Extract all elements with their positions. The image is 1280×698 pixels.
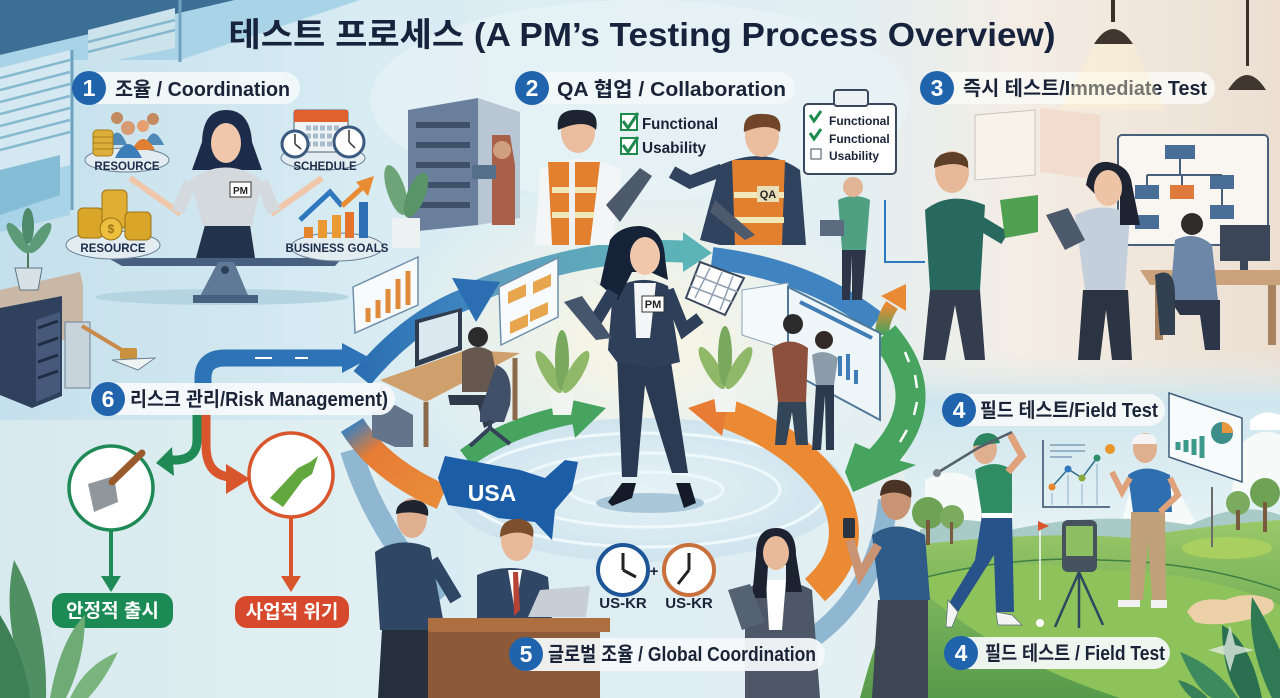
arrow: down to business crisis xyxy=(281,517,301,592)
title: 테스트 프로세스 (A PM’s Testing Process Overview) xyxy=(228,16,1056,53)
panel: immediate test xyxy=(975,108,1280,350)
label 4 bottom: 4 xyxy=(955,640,968,666)
QA collaboration: checklist: Functional xyxy=(642,116,718,133)
seesaw shadow xyxy=(95,289,349,305)
panel: coordination scene: SCHEDULE xyxy=(293,161,357,173)
USA map: USA xyxy=(468,480,516,506)
label 6: 리스크 관리/Risk Management) xyxy=(130,388,388,411)
icon: trowel in circle xyxy=(69,446,153,530)
label 3: 즉시 테스트/Immediate Test xyxy=(963,77,1207,100)
monitors: chart boards xyxy=(353,257,558,345)
resource 1 xyxy=(85,148,169,172)
panel: coordination scene: BUSINESS GOALS xyxy=(286,243,389,255)
QA collaboration: right engineer xyxy=(672,114,806,245)
panel: coordination scene: PM xyxy=(233,186,248,197)
business goals xyxy=(291,233,383,261)
coins xyxy=(66,231,160,259)
label 5: 5 xyxy=(520,641,533,667)
desk worker xyxy=(372,308,520,447)
label 4 top: 필드 테스트/Field Test xyxy=(980,399,1158,422)
immediate test: woman with tablet xyxy=(1046,162,1140,360)
field tester with phone xyxy=(843,480,930,698)
immediate test: man with folder xyxy=(923,151,1038,360)
outcome: business crisis xyxy=(235,596,349,628)
panel: field test background xyxy=(860,350,1280,698)
panel: coordination scene: $ xyxy=(108,222,115,236)
label 1 xyxy=(72,71,300,105)
clipboard checklist: Functional xyxy=(829,114,890,128)
orange large arrow xyxy=(722,412,844,590)
desk worker xyxy=(1170,236,1218,300)
QA collaboration: checklist xyxy=(621,113,718,157)
central PM figure xyxy=(564,226,744,513)
golf coach xyxy=(1112,433,1178,608)
label 2 xyxy=(515,71,795,105)
global coordination: woman xyxy=(728,528,820,698)
desk xyxy=(1140,270,1280,285)
golf device on tripod xyxy=(1036,520,1103,628)
golfer xyxy=(933,432,1022,627)
field charts xyxy=(1043,393,1242,507)
resource label: RESOURCE xyxy=(94,161,160,173)
arrow: down to stable launch xyxy=(101,530,121,592)
left lower orange arc xyxy=(352,425,442,497)
label 5 xyxy=(509,637,825,671)
seesaw xyxy=(108,258,342,266)
window: top left xyxy=(0,0,360,232)
label 3: 3 xyxy=(931,75,943,101)
top teal arc xyxy=(480,251,690,290)
clipboard checklist: Functional xyxy=(829,132,890,146)
small tester with laptop xyxy=(820,177,925,300)
label 5: 글로벌 조율 / Global Coordination xyxy=(548,643,816,666)
icon: green shoot in circle xyxy=(249,433,333,517)
process ring xyxy=(351,232,917,640)
clipboard checklist: Usability xyxy=(829,149,879,163)
top right blue arc xyxy=(712,258,876,322)
label 2: QA 협업 / Collaboration xyxy=(557,78,786,101)
clocks: US-KR xyxy=(665,595,713,612)
server racks and plant xyxy=(379,98,520,248)
left blue arrow xyxy=(362,298,468,378)
clipboard checklist xyxy=(804,90,896,174)
plant: lower left xyxy=(0,560,118,698)
label 4 bottom xyxy=(944,636,1170,670)
label 4 bottom: 필드 테스트 / Field Test xyxy=(985,642,1165,665)
QA collaboration: left engineer xyxy=(535,110,652,245)
QA collaboration: right engineer: QA xyxy=(760,189,776,201)
USA map xyxy=(438,456,578,540)
plants beside PM xyxy=(531,326,757,415)
label 6 xyxy=(90,382,395,416)
outcome: business crisis: 사업적 위기 xyxy=(246,601,338,623)
label 1: 1 xyxy=(83,75,96,101)
top right orange to green arrow xyxy=(882,305,892,335)
risk management arrow xyxy=(203,343,370,390)
schedule xyxy=(281,146,365,170)
outcome: stable launch xyxy=(52,593,173,628)
panel: coordination scene xyxy=(66,110,389,303)
clocks: + xyxy=(650,563,659,580)
central PM figure: PM xyxy=(645,299,661,311)
global coordination: desk and executive xyxy=(428,519,610,698)
office desk: left xyxy=(0,208,155,408)
clocks: US-KR xyxy=(599,595,647,612)
analytics boards with two viewers xyxy=(742,283,880,450)
ceiling lamps xyxy=(1060,0,1266,110)
clocks xyxy=(598,545,714,612)
green right arc xyxy=(878,335,911,462)
label 1: 조율 / Coordination xyxy=(115,79,290,101)
branch arrows xyxy=(156,410,250,494)
panel: coordination scene: RESOURCE xyxy=(80,243,146,255)
outcome: stable launch: 안정적 출시 xyxy=(66,600,159,622)
green inner arrow xyxy=(466,413,578,458)
label 6: 6 xyxy=(102,386,114,412)
label 2: 2 xyxy=(526,75,538,101)
label 3 xyxy=(920,71,1215,105)
global coordination: standing man xyxy=(375,498,456,698)
PM figure xyxy=(196,225,255,258)
QA collaboration: checklist: Usability xyxy=(642,140,706,157)
plant: lower right xyxy=(1178,597,1280,698)
label 4 top xyxy=(942,393,1165,427)
label 4 top: 4 xyxy=(953,397,966,423)
